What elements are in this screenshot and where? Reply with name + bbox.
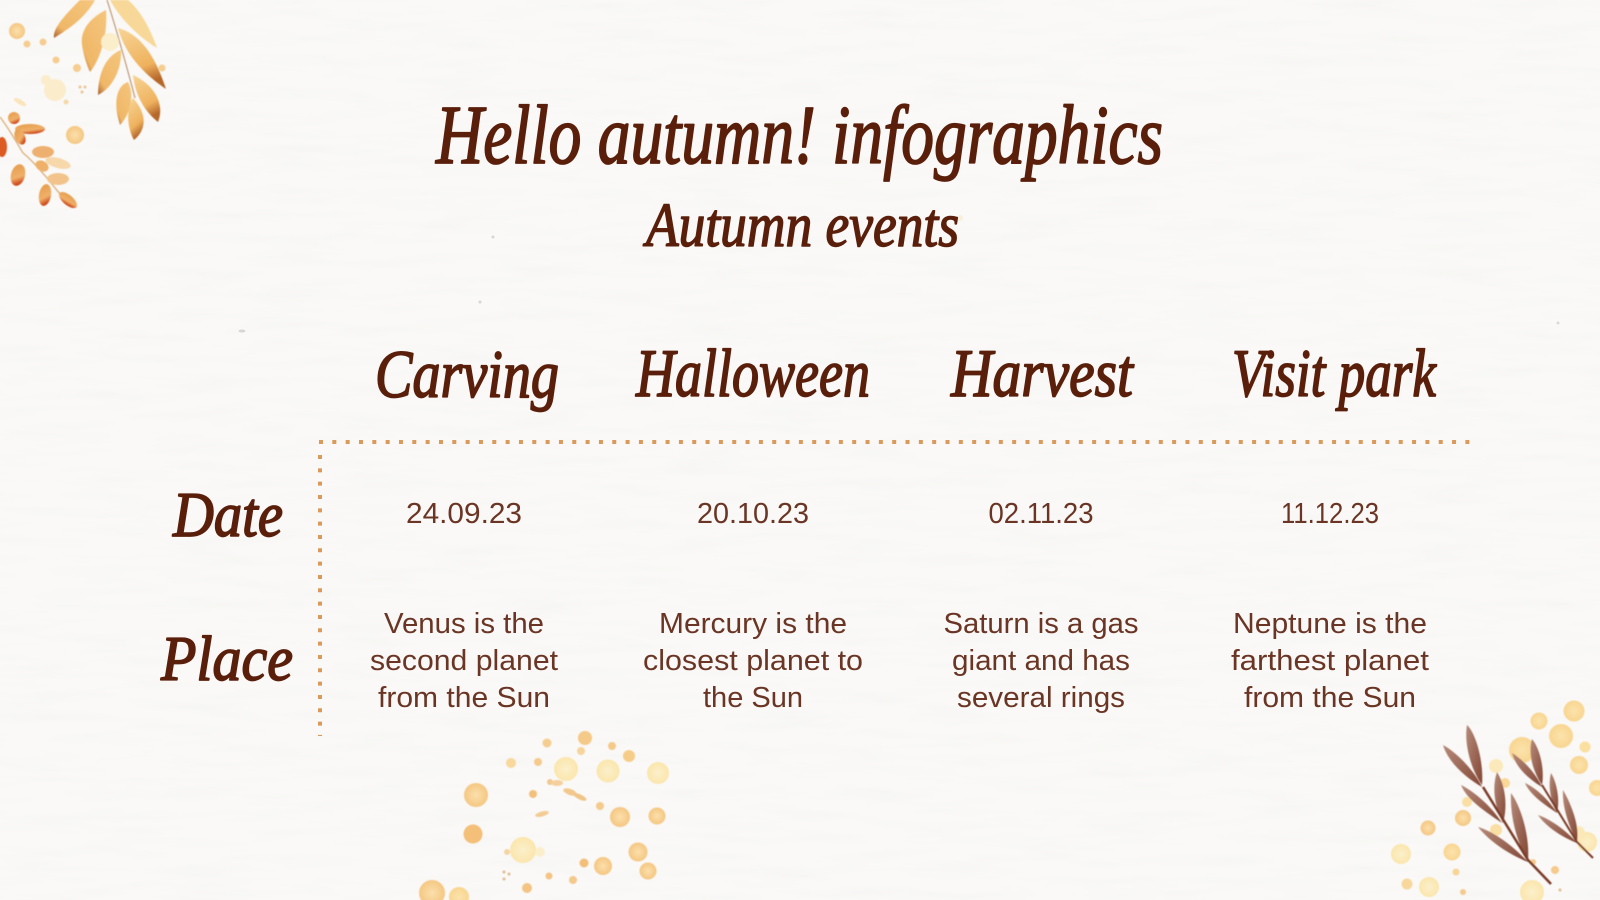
date: 24.09.23 [406, 498, 522, 530]
place description: Venus is the [384, 608, 544, 640]
place description [643, 608, 863, 714]
place description: from the Sun [1244, 682, 1416, 714]
place description: Saturn is a gas [944, 608, 1138, 640]
icon: orange leaf branch [54, 0, 166, 140]
column: Visit park [1231, 335, 1437, 714]
place description: farthest planet [1231, 645, 1429, 677]
icon: gold paint splashes [1391, 700, 1600, 900]
title: Hello autumn! infographics [435, 89, 1163, 182]
place description [1231, 608, 1429, 714]
icon: paint splashes [9, 23, 166, 144]
subtitle: Autumn events [643, 192, 959, 260]
place description: Mercury is the [659, 608, 847, 640]
illustration: top-left autumn leaves [0, 0, 166, 211]
table dividers: dotted lines [319, 442, 1470, 736]
place description: Neptune is the [1233, 608, 1427, 640]
column: Carving [370, 336, 559, 714]
date: 11.12.23 [1281, 498, 1379, 530]
illustration: bottom-centre paint splatter [419, 731, 669, 900]
column heading: Harvest [950, 335, 1135, 411]
place description: closest planet to [643, 645, 863, 677]
column: Halloween [635, 335, 870, 714]
date: 02.11.23 [988, 498, 1094, 530]
place description: the Sun [703, 682, 803, 714]
row label: Date: Date [172, 479, 283, 550]
column heading: Halloween [635, 335, 870, 411]
place description: giant and has [952, 645, 1130, 677]
column: Harvest [944, 335, 1138, 714]
row label: Place: Place [160, 623, 293, 694]
column heading: Carving [375, 336, 559, 412]
icon: small brown branch [1512, 739, 1593, 858]
place description: from the Sun [378, 682, 550, 714]
icon: red-orange berry branch [0, 112, 80, 211]
place description: several rings [957, 682, 1125, 714]
place description [370, 608, 558, 714]
place description: second planet [370, 645, 558, 677]
column heading: Visit park [1232, 335, 1437, 411]
illustration: bottom-right splatter and brown branches [1391, 700, 1600, 900]
icon: large brown branch [1443, 725, 1551, 884]
place description [944, 608, 1138, 714]
date: 20.10.23 [697, 498, 809, 530]
